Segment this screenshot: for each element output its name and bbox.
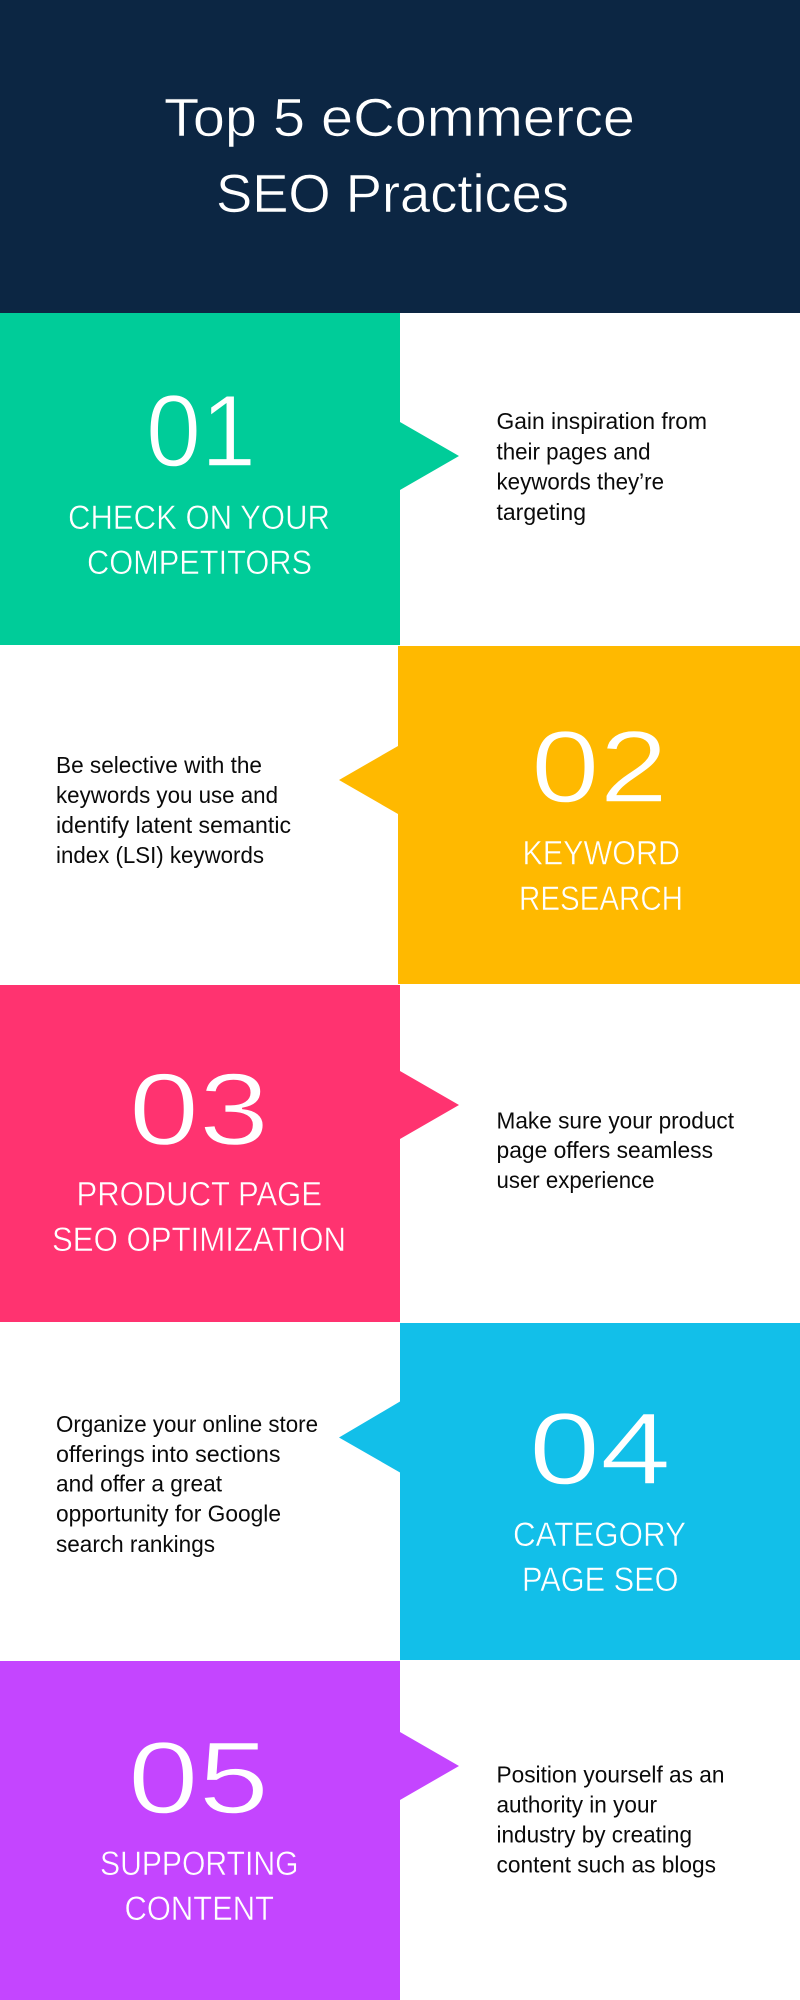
text: keyword description — [56, 752, 291, 868]
title — [164, 88, 635, 224]
heading: check on your competitors: COMPETITORS — [87, 544, 312, 582]
heading: supporting content: CONTENT — [124, 1890, 274, 1928]
text: competitors description — [496, 408, 707, 525]
heading: supporting content: SUPPORTING — [100, 1845, 298, 1883]
panel: header — [0, 0, 800, 313]
number 03: 03 — [129, 1052, 269, 1166]
text: product page description: user experience — [496, 1167, 654, 1193]
text: supporting content description: Position yourself as an — [496, 1762, 724, 1788]
panel: 01 check on your competitors — [0, 313, 459, 645]
text: competitors description: Gain inspiration from — [496, 408, 707, 434]
text: category description: opportunity for Google — [56, 1500, 281, 1526]
text: product page description — [496, 1108, 735, 1193]
title: Top 5 eCommerce — [164, 88, 635, 148]
text: product page description: page offers seamless — [496, 1137, 713, 1163]
text: supporting content description: industry by creating — [496, 1822, 692, 1848]
number 01: 01 — [146, 374, 256, 488]
number 05: 05 — [128, 1721, 269, 1835]
number 02: 02 — [531, 710, 668, 824]
heading: category page seo: CATEGORY — [513, 1516, 686, 1554]
text: supporting content description: authority in your — [496, 1792, 657, 1818]
text: competitors description: targeting — [496, 499, 586, 525]
text: supporting content description — [496, 1762, 724, 1878]
text: keyword description: index (LSI) keywords — [56, 842, 264, 868]
text: category description: and offer a great — [56, 1470, 223, 1496]
heading: product page seo optimization: SEO OPTIMIZATION — [52, 1221, 346, 1259]
heading: check on your competitors — [68, 499, 330, 582]
text: keyword description: keywords you use and — [56, 782, 278, 808]
heading: keyword research: KEYWORD — [522, 834, 680, 872]
heading: product page seo optimization — [52, 1176, 346, 1259]
heading: category page seo: PAGE SEO — [522, 1561, 678, 1599]
text: category description — [56, 1411, 318, 1557]
text: category description: offerings into sections — [56, 1441, 280, 1467]
text: keyword description: identify latent semantic — [56, 812, 291, 838]
panel: 03 product page seo optimization — [0, 985, 459, 1322]
heading: category page seo — [513, 1516, 686, 1599]
heading: keyword research — [519, 834, 683, 918]
text: category description: search rankings — [56, 1531, 215, 1557]
panel: 02 keyword research — [339, 646, 800, 984]
heading: check on your competitors: CHECK ON YOUR — [68, 499, 330, 537]
text: competitors description: their pages and — [496, 438, 650, 464]
heading: product page seo optimization: PRODUCT PAGE — [76, 1176, 322, 1214]
text: competitors description: keywords they’re — [496, 468, 664, 494]
text: product page description: Make sure your product — [496, 1108, 735, 1134]
heading: supporting content — [100, 1845, 298, 1928]
panel: 04 category page seo — [339, 1323, 800, 1660]
text: category description: Organize your online store — [56, 1411, 318, 1437]
number 04: 04 — [529, 1392, 671, 1506]
text: supporting content description: content such as blogs — [496, 1852, 716, 1878]
heading: keyword research: RESEARCH — [519, 880, 683, 918]
panel: 05 supporting content — [0, 1661, 459, 2000]
text: keyword description: Be selective with the — [56, 752, 262, 778]
title: SEO Practices — [216, 164, 569, 224]
